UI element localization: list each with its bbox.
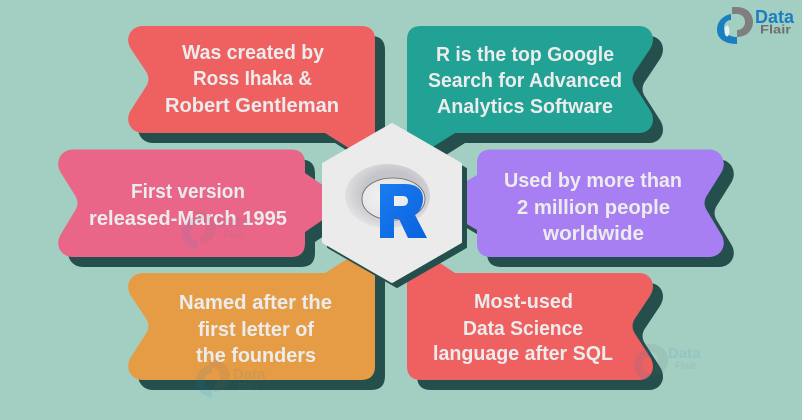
panel shape	[128, 26, 375, 150]
panel shadow	[417, 265, 663, 390]
panel text: first letter of	[198, 318, 314, 341]
panel: data science	[407, 255, 663, 390]
panel text	[504, 169, 682, 245]
watermark: name origin panel: Flair	[238, 382, 259, 393]
panel text: Data Science	[463, 317, 583, 340]
watermark: name origin panel	[196, 360, 266, 397]
panel text: the founders	[196, 344, 316, 367]
panel text: language after SQL	[433, 342, 613, 365]
logo word Data: Data	[755, 7, 795, 27]
panel: Google search	[407, 26, 663, 160]
panel text: released-March 1995	[89, 207, 287, 230]
panel text: Search for Advanced	[428, 69, 622, 92]
panel shape	[455, 150, 724, 257]
logo letter R	[380, 184, 427, 238]
icon: R logo	[345, 164, 430, 238]
central hexagon	[324, 124, 466, 286]
panel: created by	[128, 26, 385, 160]
panel text	[428, 43, 622, 118]
panel shape	[407, 26, 653, 150]
panel text: Analytics Software	[437, 95, 613, 118]
panel text: R is the top Google	[436, 43, 614, 66]
panel shadow	[138, 266, 385, 390]
logo mark blue	[717, 14, 737, 44]
panel text	[179, 291, 332, 367]
logo mark grey	[732, 7, 753, 37]
panel shadow	[138, 36, 385, 160]
panel: users	[455, 150, 734, 267]
panel text: worldwide	[542, 222, 644, 245]
logo ring	[345, 164, 430, 228]
watermark: data science panel: Data	[668, 345, 701, 362]
panel shape	[58, 150, 330, 257]
panel text: First version	[131, 180, 245, 203]
hexagon shadow	[328, 130, 466, 286]
logo word Flair: Flair	[760, 22, 791, 36]
panel shadow	[417, 36, 663, 160]
watermark: data science panel	[634, 344, 701, 381]
watermark: first version panel: Data	[217, 214, 250, 231]
panel text: Used by more than	[504, 169, 682, 192]
panel text: Ross Ihaka &	[193, 67, 312, 90]
brand logo: DataFlair	[717, 7, 795, 44]
hexagon face	[324, 124, 460, 282]
panel text: Named after the	[179, 291, 332, 314]
panel text	[165, 41, 339, 117]
logo mark highlight	[724, 26, 730, 36]
panel text	[89, 180, 287, 230]
watermark: data science panel: Flair	[675, 361, 696, 372]
watermark: name origin panel: Data	[233, 366, 266, 383]
watermark: first version panel: Flair	[224, 230, 245, 241]
panel shadow	[68, 160, 340, 267]
panel: first version	[58, 150, 340, 267]
panel shape	[407, 255, 653, 380]
logo ring hole	[362, 178, 425, 220]
watermark: first version panel	[182, 212, 250, 249]
panel text: Was created by	[182, 41, 325, 64]
panel shadow	[465, 160, 734, 267]
panel text: Most-used	[474, 290, 573, 313]
panel: name origin	[128, 256, 385, 390]
panel text: Robert Gentleman	[165, 94, 339, 117]
panel shape	[128, 256, 375, 380]
panel text: 2 million people	[517, 196, 670, 219]
panel text	[433, 290, 613, 365]
